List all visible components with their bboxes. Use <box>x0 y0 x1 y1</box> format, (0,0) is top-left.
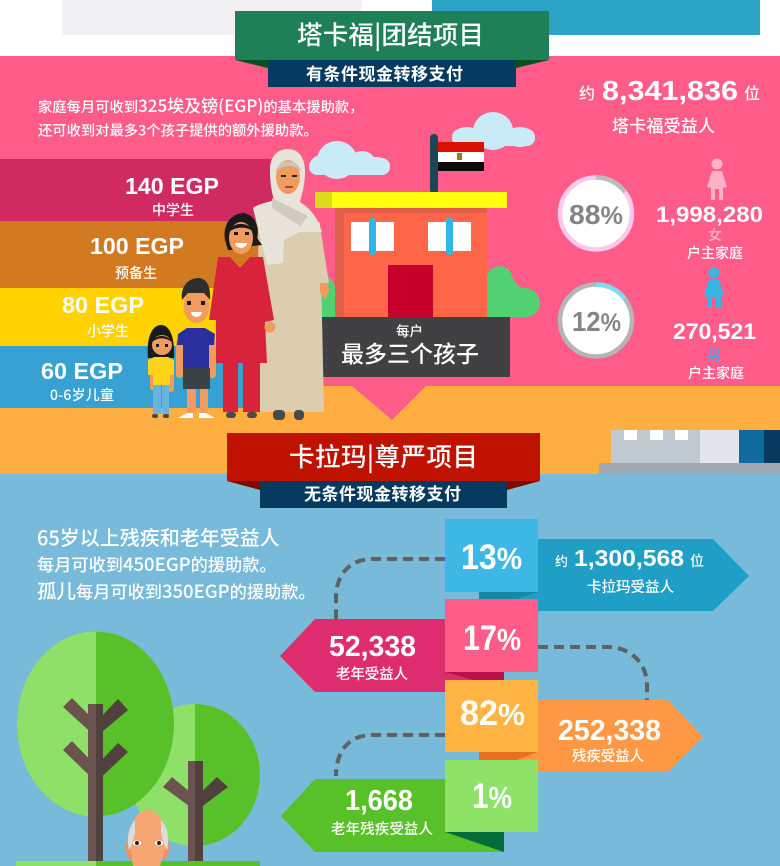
figure: girl <box>148 325 174 418</box>
illustration: building at section edge <box>599 430 780 474</box>
illustration: house <box>300 192 540 317</box>
stat: male-headed households: 男 <box>707 345 721 365</box>
figure: mother in hijab <box>253 149 329 420</box>
text block: Karama description <box>37 522 316 604</box>
arrow: 1,668 elderly disabled beneficiaries <box>281 779 504 852</box>
heading: Takaful banner <box>235 11 549 87</box>
tile: 17%: 17% <box>463 619 521 658</box>
chart: allowance bands: 中学生 <box>152 200 194 220</box>
stat: Takaful beneficiaries: 约 <box>579 80 595 104</box>
figure: boy <box>176 278 216 418</box>
callout: up to three children per household: 最多三个孩子 <box>341 335 479 369</box>
chart: allowance bands: 60 EGP <box>41 358 123 384</box>
text block: Takaful description <box>38 92 363 140</box>
illustration: family <box>148 149 329 420</box>
arrow: 1,668 elderly disabled beneficiaries: 老年残疾受益人 <box>331 818 434 839</box>
chart: allowance bands: 小学生 <box>87 321 129 341</box>
tile: 1% <box>445 760 538 832</box>
stat: male-headed households: 户主家庭 <box>688 363 744 383</box>
icon: cloud left <box>309 141 390 179</box>
heading: Karama banner <box>227 433 540 508</box>
chart: 12% male-headed donut: 12% <box>572 306 621 337</box>
chart: allowance bands: 预备生 <box>115 263 157 283</box>
text block: Takaful description: 还可收到对最多3个孩子提供的额外援助款。 <box>38 120 318 140</box>
top strip: cropped previous section <box>0 0 780 56</box>
text block: Takaful description: 家庭每月可收到325埃及镑(EGP)的基本援助款， <box>38 92 363 117</box>
icon: male figure <box>704 268 724 308</box>
tile: 13% <box>445 519 538 592</box>
text block: Karama description: 每月可收到450EGP的援助款。 <box>37 551 277 577</box>
heading: Takaful banner: 有条件现金转移支付 <box>306 60 463 85</box>
arrow: 1,668 elderly disabled beneficiaries: 1,668 <box>345 785 413 817</box>
arrow: 252,338 disabled beneficiaries: 残疾受益人 <box>572 745 644 766</box>
connector: dashed line 82% to elderly disabled <box>336 735 445 776</box>
tile: 1%: 1% <box>472 777 512 816</box>
chart: 88% female-headed donut <box>560 177 632 250</box>
panel: orange divider band <box>0 386 780 474</box>
icon: cloud right <box>452 112 535 150</box>
arrow: 1,300,568 Karama beneficiaries: 卡拉玛受益人 <box>587 576 674 597</box>
chart: allowance bands: 0-6岁儿童 <box>50 385 114 405</box>
icon: female figure <box>707 158 727 200</box>
stat: female-headed households: 1,998,280 <box>656 202 763 227</box>
tile: 82% <box>445 680 538 752</box>
stat: Takaful beneficiaries: 塔卡福受益人 <box>612 112 715 137</box>
text block: Karama description: 孤儿每月可收到350EGP的援助款。 <box>37 575 316 604</box>
arrow: 1,300,568 Karama beneficiaries: 位 <box>690 551 704 571</box>
tile: 13%: 13% <box>461 538 522 577</box>
figure: elderly man <box>125 809 170 866</box>
illustration: trees <box>16 632 260 866</box>
callout: up to three children per household <box>320 317 510 420</box>
chart: allowance bands: 100 EGP <box>90 233 184 259</box>
stat: male-headed households <box>673 319 756 383</box>
arrow: 52,338 elderly beneficiaries <box>280 619 504 692</box>
chart: allowance bands <box>0 159 290 408</box>
chart: allowance bands: 80 EGP <box>62 292 144 318</box>
stat: Takaful beneficiaries: 8,341,836 <box>602 75 738 106</box>
panel: Takaful section background <box>0 56 780 386</box>
stat: Takaful beneficiaries: 位 <box>744 80 760 104</box>
ground strip <box>16 861 260 866</box>
connector: dashed line 13% to elderly <box>336 559 445 619</box>
panel: Karama section background <box>0 474 780 866</box>
heading: Takaful banner: 塔卡福|团结项目 <box>297 15 484 52</box>
chart: 88% female-headed donut: 88% <box>569 199 623 230</box>
icon: small tree <box>130 704 260 866</box>
callout: up to three children per household: 每户 <box>396 320 423 340</box>
chart: allowance bands: 140 EGP <box>125 173 219 199</box>
stat: male-headed households: 270,521 <box>673 319 756 344</box>
arrow: 52,338 elderly beneficiaries: 老年受益人 <box>336 663 408 684</box>
heading: Karama banner: 无条件现金转移支付 <box>304 480 461 505</box>
tile: 17% <box>445 599 538 672</box>
arrow: 1,300,568 Karama beneficiaries: 约 <box>555 551 568 570</box>
stat: Takaful beneficiaries <box>579 75 760 137</box>
arrow: 252,338 disabled beneficiaries: 252,338 <box>558 715 661 747</box>
stat: female-headed households: 户主家庭 <box>687 243 743 263</box>
arrow: 252,338 disabled beneficiaries <box>479 700 703 772</box>
text block: Karama description: 65岁以上残疾和老年受益人 <box>37 522 280 551</box>
icon: Egyptian flag <box>430 134 484 194</box>
figure: woman in red <box>209 213 276 418</box>
chart: 12% male-headed donut <box>560 284 632 356</box>
arrow: 1,300,568 Karama beneficiaries <box>479 539 749 611</box>
tile: 82%: 82% <box>460 694 525 733</box>
icon: large tree <box>17 632 174 866</box>
arrow: 52,338 elderly beneficiaries: 52,338 <box>329 631 416 663</box>
stat: female-headed households <box>656 202 763 263</box>
connector: dashed line 17% to disabled <box>538 647 647 700</box>
stat: female-headed households: 女 <box>708 225 722 245</box>
heading: Karama banner: 卡拉玛|尊严项目 <box>289 437 478 474</box>
arrow: 1,300,568 Karama beneficiaries: 1,300,568 <box>574 545 684 571</box>
